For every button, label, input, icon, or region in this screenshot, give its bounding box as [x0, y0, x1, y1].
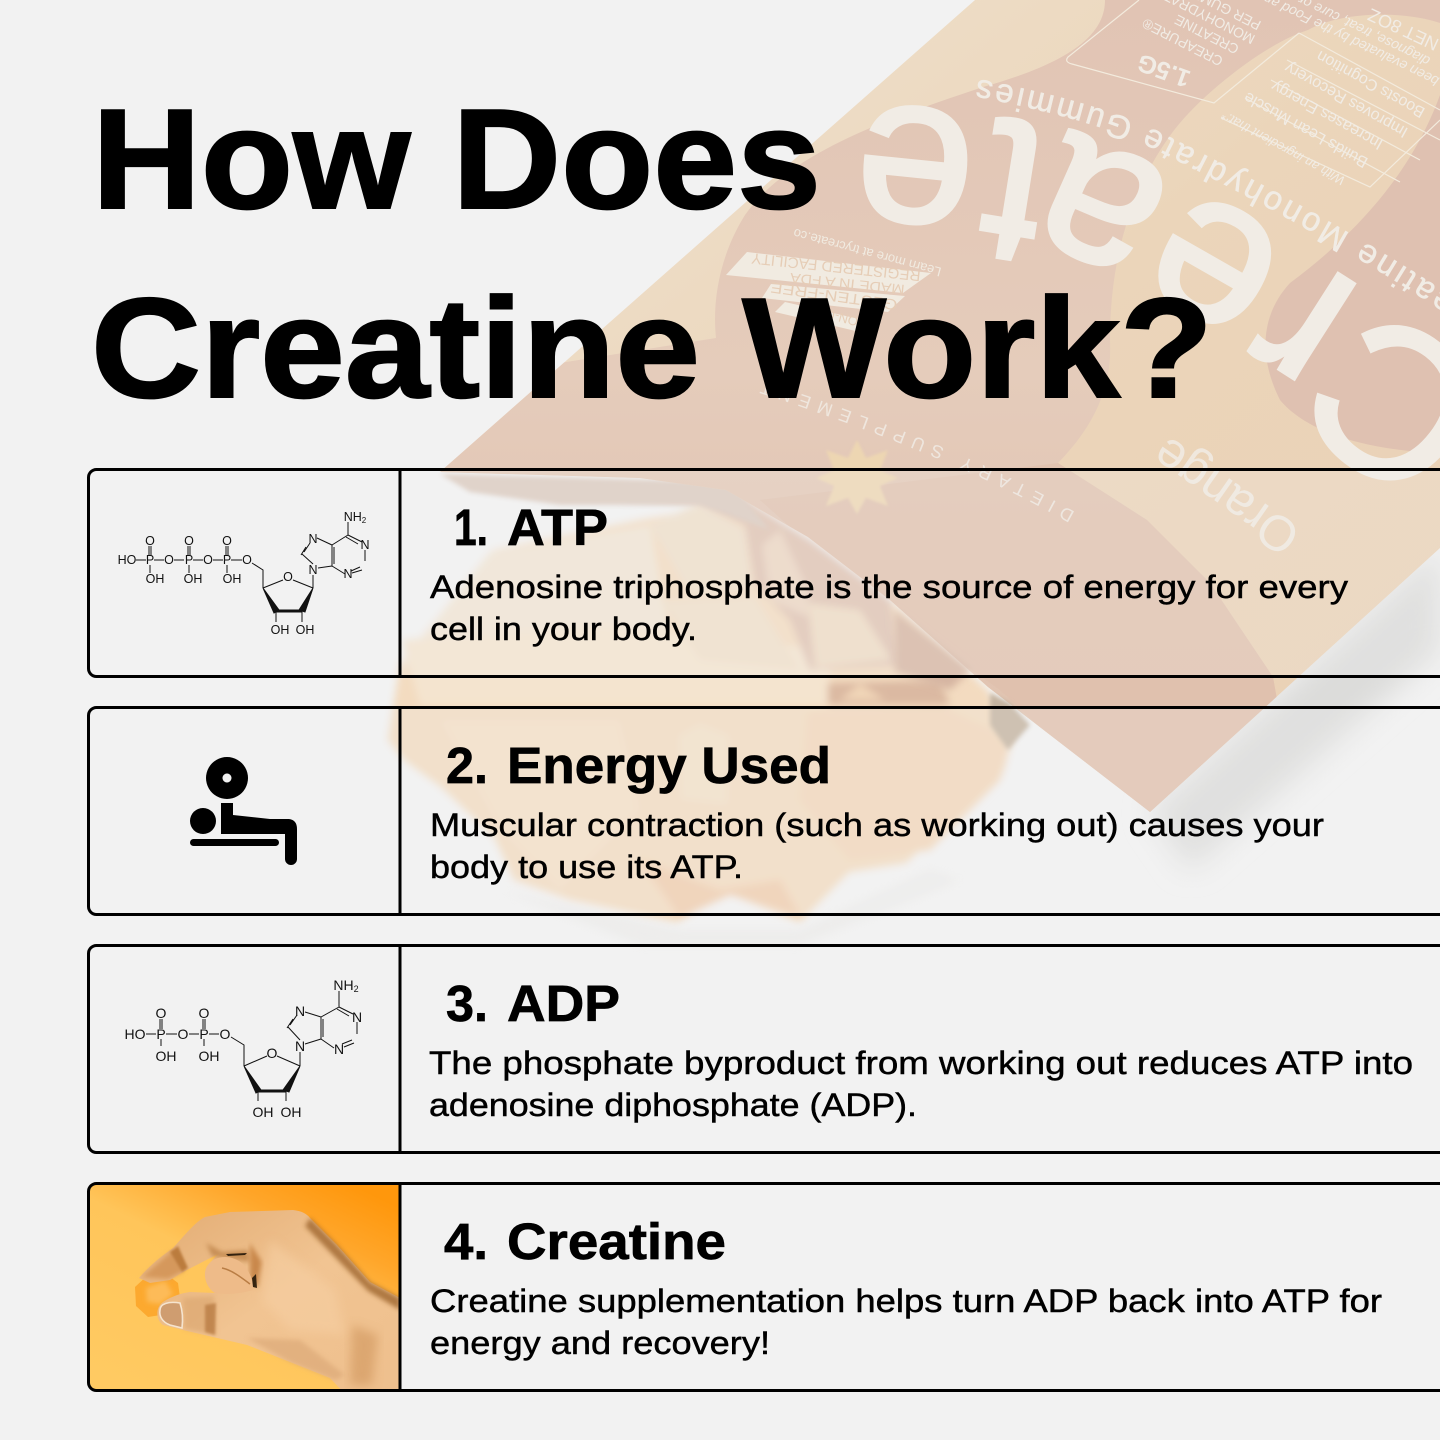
description: The phosphate byproduct from working out reduces ATP into: [429, 1045, 1413, 1081]
description: energy and recovery!: [430, 1325, 770, 1361]
description: [430, 569, 1348, 647]
molecule labels: [118, 510, 370, 637]
text: dietary supplement: DIETARY SUPPLEMENT: [760, 388, 1074, 522]
molecule labels: P: [146, 553, 154, 567]
description: Muscular contraction (such as working out) causes your: [430, 807, 1324, 843]
shadow at pouch mouth: [440, 474, 770, 530]
gummies spilling out: [388, 490, 1012, 922]
pouch dark pink block right: [1266, 95, 1440, 453]
text: benefits list: Increases Energy: [1269, 77, 1386, 152]
text: serving info: CREATINE: [1172, 12, 1241, 58]
description: body to use its ATP.: [430, 849, 743, 885]
heading: 3.: [446, 975, 488, 1032]
heading: ADP: [507, 975, 620, 1032]
gummy: cube B: [762, 530, 808, 617]
palm shade bottom: [253, 1338, 342, 1379]
molecule labels: O: [184, 534, 194, 548]
molecule labels: OH: [156, 1048, 176, 1064]
title: [91, 80, 1213, 428]
middle finger: [205, 1257, 253, 1294]
gummy: mid cubes: [660, 595, 800, 670]
thumb crease: [205, 1303, 216, 1335]
molecule labels: NH: [333, 977, 354, 993]
gummy: lower-left cream row: [402, 625, 830, 705]
gummy: front right peach cube: [800, 706, 1012, 860]
table shadow under gummies: [500, 870, 960, 945]
hand shading: knuckle under index: [206, 1243, 250, 1262]
palm highlight: [266, 1247, 339, 1330]
molecule labels: O: [203, 553, 213, 567]
description: Creatine supplementation helps turn ADP back into ATP for: [430, 1283, 1382, 1319]
molecule labels: O: [242, 553, 252, 567]
title: How Does: [92, 80, 821, 239]
text: benefits list: Builds Lean Muscle: [1241, 88, 1371, 170]
molecule labels: P: [199, 1026, 209, 1042]
text: benefits list: With an ingredient that:*: [1218, 108, 1347, 188]
dark wedge inside pouch mouth: [990, 693, 1030, 750]
description: [430, 807, 1324, 885]
text: disclaimer: [1264, 0, 1440, 86]
description: [430, 1283, 1382, 1361]
gummy: cube A: [650, 503, 752, 595]
text: benefits list: Improves Recovery: [1282, 59, 1411, 140]
panel: 2 Energy Used: [88, 707, 1440, 915]
text: benefits list: Boosts Cognition: [1314, 47, 1428, 120]
icon: ATP molecule: [136, 522, 365, 622]
gummy: [135, 1278, 180, 1317]
text: benefits list: [1218, 47, 1428, 188]
molecule labels: O: [156, 1005, 167, 1021]
molecule labels: OH: [198, 1048, 220, 1064]
molecule labels: N: [295, 1003, 305, 1019]
icon: bench press: [190, 757, 297, 865]
molecule labels: OH: [252, 1104, 274, 1120]
pouch shadow on table: [1150, 548, 1440, 870]
icon: ADP molecule: [146, 991, 357, 1101]
molecule labels: N: [334, 1041, 344, 1057]
gummy: dark gap at mouth: [828, 680, 950, 705]
label: facility badges: MADE IN A FDA: [789, 270, 905, 298]
pouch lip shadow: [894, 610, 971, 690]
heading: 2.: [446, 737, 488, 794]
gummy: cube C: [808, 603, 892, 668]
molecule labels: OH: [146, 572, 164, 586]
description: [429, 1045, 1413, 1123]
panel: 3 ADP: [88, 945, 1440, 1153]
photo: hand holding gummy: [89, 1185, 400, 1392]
label: facility badges: [726, 226, 943, 332]
background product photo: creatine gummies pouch: [348, 0, 1440, 926]
molecule labels: O: [199, 1005, 210, 1021]
middle finger crease: [222, 1268, 250, 1284]
molecule labels: N: [343, 567, 353, 581]
molecule labels: OH: [223, 572, 241, 586]
thumb shading: [183, 1296, 216, 1335]
gummy: bottom shade: [640, 860, 800, 918]
molecule labels: 2: [354, 984, 359, 994]
molecule labels: OH: [271, 623, 289, 637]
panel: 4 Creatine: [88, 1183, 1440, 1392]
text: net weight: NET 8OZ: [1365, 4, 1440, 55]
description: cell in your body.: [430, 611, 697, 647]
wrist shade: [350, 1325, 378, 1385]
pouch lower band shade: [760, 463, 1300, 830]
gummy: light cube front: [678, 723, 730, 805]
molecule labels: O: [164, 553, 174, 567]
label: facility badges: Learn more at trycreate.co: [792, 226, 943, 280]
text: serving info: CREAPURE®: [1139, 15, 1225, 70]
molecule labels: O: [267, 1045, 278, 1061]
molecule labels: O: [145, 534, 155, 548]
heading: [446, 975, 620, 1032]
pouch body: [440, 0, 1440, 812]
label: facility badges: REGISTERED FACILITY: [751, 249, 921, 284]
label: nutrition box outline: [1067, 0, 1299, 103]
heading: Creatine: [507, 1213, 726, 1270]
molecule labels: OH: [280, 1104, 302, 1120]
molecule labels: [124, 977, 362, 1120]
text: Orange flavour: Orange: [1142, 426, 1309, 567]
molecule labels: N: [308, 532, 318, 546]
title: Creatine Work?: [91, 269, 1213, 428]
molecule labels: N: [295, 1038, 305, 1054]
label: benefits box outline: [1221, 33, 1440, 187]
molecule labels: O: [220, 1026, 231, 1042]
molecule labels: P: [185, 553, 193, 567]
hand shading: top edge: [305, 1218, 400, 1310]
label: facility badges: NON-GMO: [803, 300, 869, 332]
heading: Energy Used: [507, 737, 831, 794]
molecule labels: O: [283, 570, 293, 584]
molecule labels: 2: [362, 516, 367, 525]
text: serving info: 1.5G: [1134, 48, 1194, 93]
heading: 4.: [444, 1213, 488, 1270]
heading: 1.: [454, 499, 488, 556]
label: facility badges: GLUTEN-FREE: [769, 278, 899, 313]
heading: ATP: [507, 499, 608, 556]
gummy: shade between cubes: [620, 490, 900, 670]
flower logo: [820, 443, 894, 512]
hand: index finger, palm and thumb: [139, 1210, 400, 1392]
molecule labels: N: [352, 1009, 362, 1025]
molecule labels: O: [178, 1026, 189, 1042]
text: serving info: [1138, 0, 1261, 86]
gummy: front left peach: [440, 720, 640, 890]
molecule labels: P: [223, 553, 231, 567]
molecule labels: OH: [296, 623, 314, 637]
molecule labels: O: [222, 534, 232, 548]
thumb nail: [160, 1302, 183, 1328]
molecule labels: OH: [184, 572, 202, 586]
description: Adenosine triphosphate is the source of energy for every: [430, 569, 1348, 605]
dark gap behind fingers: [226, 1253, 257, 1288]
molecule labels: N: [308, 563, 318, 577]
description: adenosine diphosphate (ADP).: [429, 1087, 917, 1123]
pouch pink colour block: [430, 0, 1440, 830]
hand shading: index tip: [142, 1251, 184, 1279]
molecule labels: HO: [118, 553, 137, 567]
molecule labels: HO: [124, 1026, 146, 1042]
molecule labels: N: [360, 538, 370, 552]
hand shading: fold beside middle finger: [250, 1243, 262, 1288]
heading: [454, 499, 608, 556]
molecule labels: P: [156, 1026, 166, 1042]
molecule labels: NH: [344, 510, 362, 524]
panel: 1 ATP: [88, 469, 1440, 677]
gummy: left cream cubes: [400, 525, 670, 665]
